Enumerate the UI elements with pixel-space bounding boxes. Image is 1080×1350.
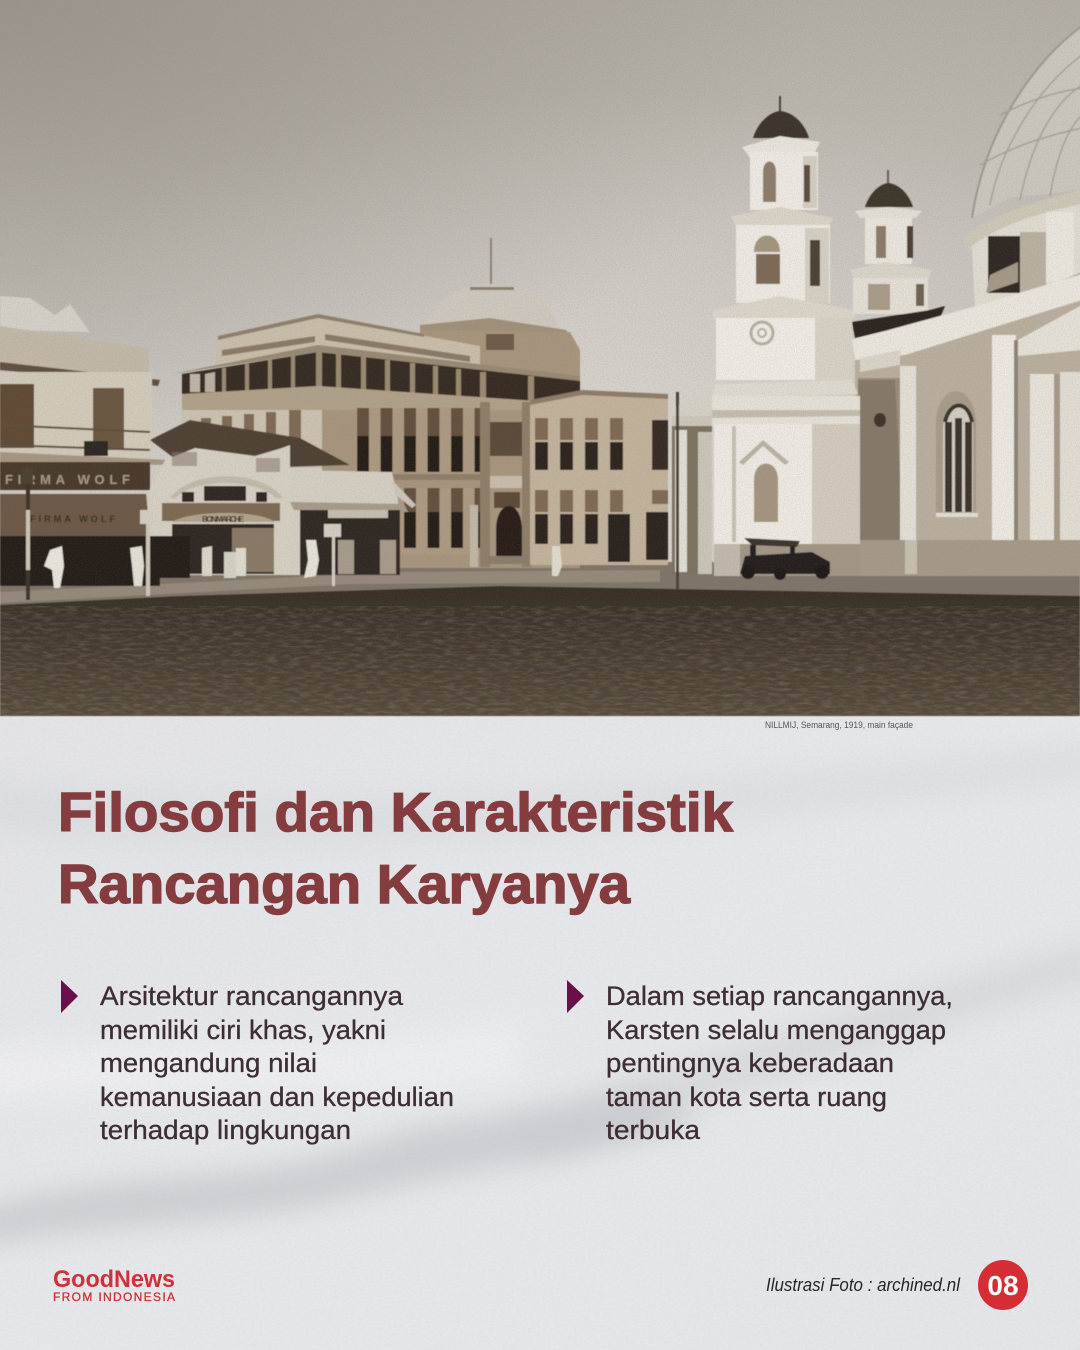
- icon: bullet triangle: [61, 980, 78, 1013]
- logo: GoodNews from Indonesia: FROM INDONESIA: [53, 1290, 175, 1304]
- lamp post: [22, 468, 33, 600]
- paper background: [0, 700, 1080, 1350]
- central wall: [322, 410, 580, 568]
- central bay: [488, 422, 528, 564]
- title: [58, 781, 733, 915]
- portico: [672, 392, 712, 574]
- street highlights: [0, 570, 660, 603]
- logo: GoodNews from Indonesia: GoodNews: [53, 1266, 175, 1293]
- loggia storey: [182, 352, 580, 410]
- lawn: [0, 586, 1080, 716]
- historic photo: Nillmij building and Blenduk church, Semarang: [0, 0, 1080, 716]
- dome drum: [963, 190, 1080, 310]
- vintage car: [740, 538, 830, 580]
- photo credit: Ilustrasi Foto : archined.nl: [766, 1275, 961, 1295]
- photo sky: [0, 0, 1080, 600]
- text: point one: Arsitektur rancangannya: [100, 981, 404, 1011]
- text: point two: Dalam setiap rancangannya,: [606, 981, 953, 1011]
- text: point one: terhadap lingkungan: [100, 1115, 351, 1145]
- sign band: [0, 462, 150, 490]
- photo credit caption: NILLMIJ, Semarang, 1919, main façade: [765, 720, 913, 730]
- text: point one: mengandung nilai: [100, 1048, 317, 1078]
- tower two: [850, 170, 945, 338]
- church arched window: [936, 391, 978, 517]
- text: point one: memiliki ciri khas, yakni: [100, 1015, 386, 1045]
- building: white Bon Marche shop: BON MARCHE: [202, 515, 245, 524]
- building: right wing: [530, 390, 668, 565]
- title: Rancangan Karyanya: [58, 853, 630, 915]
- logo: GoodNews from Indonesia: [53, 1266, 175, 1304]
- building: neighbouring shop: [290, 470, 416, 575]
- church body: [852, 272, 1080, 576]
- left wing upper wall: [182, 410, 322, 468]
- pedestrians and street furniture: [22, 392, 679, 600]
- text: point two: terbuka: [606, 1115, 701, 1145]
- building: white Bon Marche shop: [150, 420, 350, 575]
- street: [0, 562, 1080, 607]
- page number badge: 08: [987, 1270, 1019, 1301]
- text: point two: pentingnya keberadaan: [606, 1048, 894, 1078]
- awning: FIRMA WOLF: [30, 514, 116, 524]
- blenduk church: [672, 26, 1080, 580]
- loggia balustrade: [182, 386, 580, 414]
- text: point one: [100, 981, 454, 1145]
- loggia pillars: [222, 352, 534, 406]
- lawn texture: [0, 606, 1080, 716]
- sign band: FIRMA WOLF: [5, 472, 130, 487]
- text: point two: Karsten selalu menganggap: [606, 1015, 946, 1045]
- text: point two: taman kota serta ruang: [606, 1082, 887, 1112]
- text: point one: kemanusiaan dan kepedulian: [100, 1082, 454, 1112]
- photo grain: [0, 0, 1080, 716]
- page number badge: [978, 1260, 1028, 1310]
- building: left shop with Firma Wolf sign: [0, 296, 170, 586]
- icon: bullet triangle: [567, 980, 584, 1013]
- roof parapet: [216, 316, 480, 372]
- tower one: [712, 96, 860, 576]
- title: Filosofi dan Karakteristik: [58, 781, 733, 843]
- text: point two: [606, 981, 953, 1145]
- point two: [567, 980, 953, 1145]
- dome: [420, 238, 570, 338]
- point one: [61, 980, 454, 1145]
- church dome: [972, 26, 1080, 218]
- awning: [0, 494, 150, 536]
- building: Nillmij main block: [172, 238, 580, 568]
